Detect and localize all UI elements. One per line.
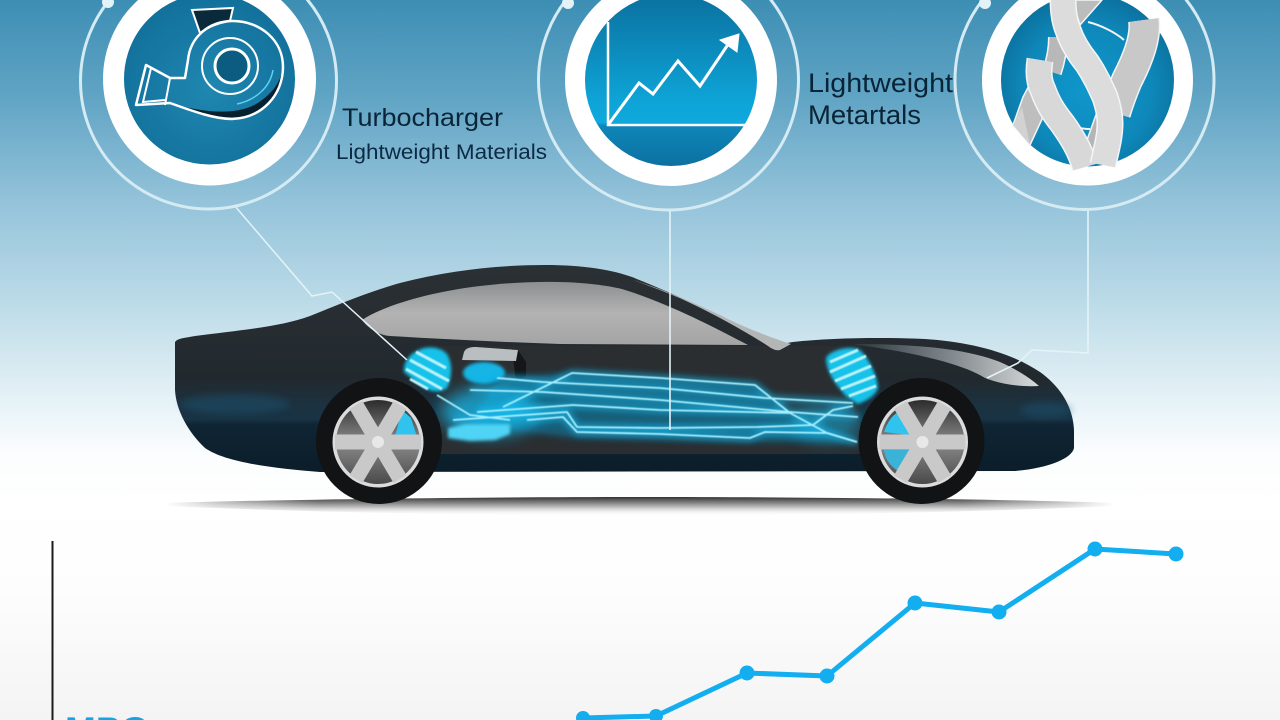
rear body glow [180,394,290,414]
label: lightweight materials left: Lightweight Materials [336,141,547,164]
glowing energy lines [437,373,858,442]
twisted strands [1013,0,1144,167]
car shadow [174,497,1106,513]
side panel [440,346,860,454]
rear wheel [316,378,442,504]
main strand [1063,0,1110,165]
hood highlight [850,344,1039,386]
label: turbocharger: Turbocharger [342,104,503,132]
turbine glyph [136,8,284,119]
front wheel [858,378,984,504]
connector line: chart [669,209,671,430]
label: lightweight metals right: Metartals [808,100,921,130]
front body glow [1020,402,1072,418]
label: lightweight metals right: Lightweight [808,68,954,98]
car body [175,265,1074,472]
engine block [459,347,526,386]
label: lightweight metals right [808,68,954,130]
MPG line chart [576,542,1184,720]
chart glyph [608,22,746,125]
rear glow [448,424,510,441]
connector line: metals [987,209,1088,378]
back strands [1072,0,1102,25]
icon badge: rising chart [538,0,798,210]
blue glow field [440,373,862,442]
second strand [1039,60,1085,167]
thin arcs [1088,22,1124,40]
rear coil [404,347,451,391]
silver windshield strip [630,279,791,350]
side window [362,282,748,345]
connector line: turbocharger [234,205,407,360]
car illustration [175,265,1074,504]
chart axis [52,541,54,720]
icon badge: twisted metal strands [955,0,1214,210]
icon badge: turbocharger [80,0,336,209]
front coil [826,348,878,404]
